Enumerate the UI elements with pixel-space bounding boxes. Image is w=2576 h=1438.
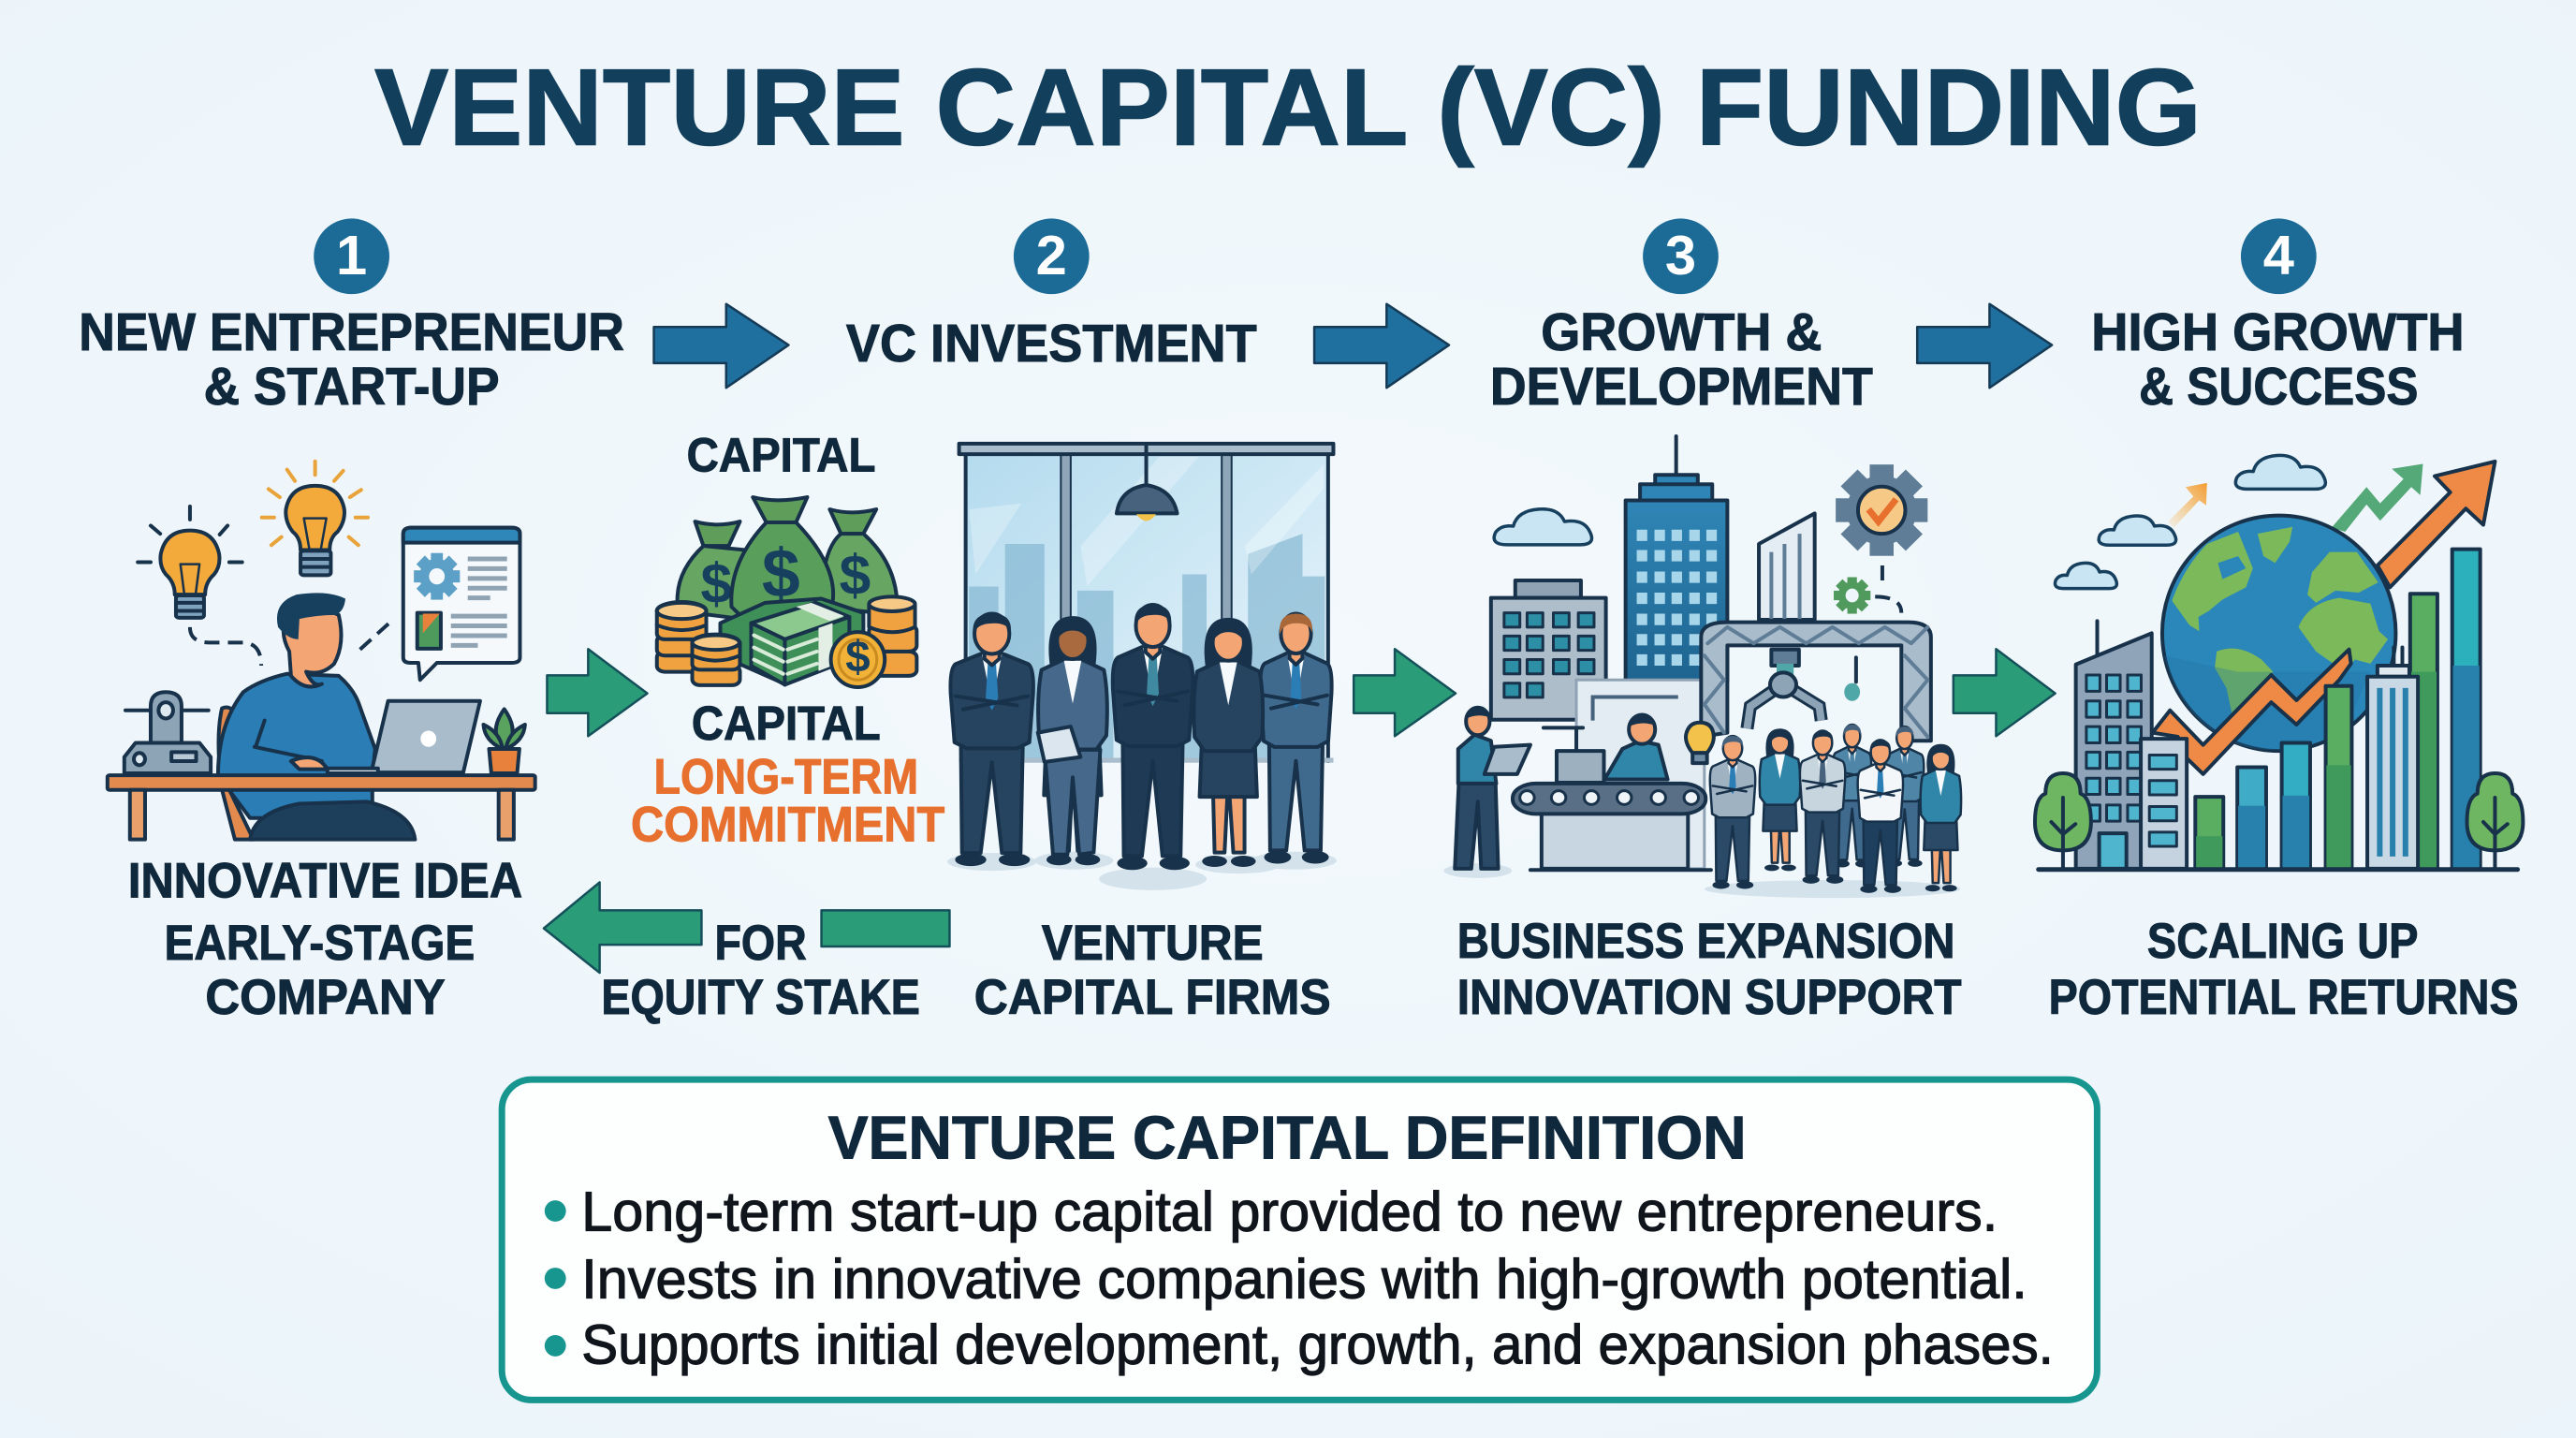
icon: money bags, coins and cash: $	[701, 551, 732, 615]
arrow: idea to capital	[547, 649, 648, 736]
bullet 3: Supports initial development, growth, and expansion phases.	[581, 1313, 2054, 1376]
label: scaling up, potential returns: POTENTIAL RETURNS	[2049, 970, 2519, 1025]
arrow: firms to growth	[1354, 649, 1456, 736]
step number 3: 3	[1665, 224, 1696, 286]
icon: conveyor belt	[1513, 727, 1711, 870]
worker with tablet	[1443, 707, 1530, 878]
icon: green gear	[1834, 578, 1870, 614]
label: business expansion, innovation support: BUSINESS EXPANSION	[1457, 914, 1955, 969]
label: long-term commitment: LONG-TERM	[654, 750, 918, 805]
step number 4	[2241, 218, 2317, 294]
icon: potted plant	[483, 709, 525, 773]
robot arm	[1747, 650, 1860, 728]
label: for equity stake	[601, 916, 920, 1025]
gantry crane	[1701, 623, 1931, 741]
orange zigzag growth line	[2153, 650, 2351, 774]
step number 1	[314, 218, 389, 294]
arrow: step 3 to 4	[1917, 304, 2052, 388]
step 2 heading: VC INVESTMENT	[846, 314, 1257, 373]
label: business expansion, innovation support: INNOVATION SUPPORT	[1457, 970, 1962, 1025]
worker seated at machine	[1604, 714, 1668, 779]
factory wall	[1576, 680, 1705, 869]
label: early-stage company: COMPANY	[205, 970, 446, 1025]
team of staff	[1705, 725, 1961, 898]
icon: entrepreneur at desk with ideas	[108, 462, 916, 840]
arrow: equity stake return	[544, 882, 949, 973]
label: capital (lower): CAPITAL	[692, 697, 881, 750]
big orange arrow	[2378, 462, 2495, 587]
icon: bulb	[1686, 723, 1714, 763]
icon: coin stacks	[657, 596, 916, 687]
ceiling lamp	[1117, 447, 1178, 521]
label: venture capital firms	[974, 916, 1331, 1025]
label: capital (top): CAPITAL	[687, 429, 875, 482]
label: scaling up, potential returns: SCALING UP	[2147, 914, 2419, 969]
step 4 heading	[2091, 218, 2465, 416]
label: business expansion, innovation support	[1457, 914, 1962, 1025]
team members	[950, 605, 1332, 870]
icon: chair	[219, 708, 254, 840]
illustration: high growth and success	[2035, 455, 2523, 870]
label: innovative idea: INNOVATIVE IDEA	[128, 853, 522, 908]
step 1 heading: & START-UP	[204, 357, 500, 416]
label: early-stage company: EARLY-STAGE	[165, 916, 475, 971]
label: for equity stake: FOR	[714, 916, 807, 971]
panel: venture capital definition	[502, 1079, 2097, 1400]
label: scaling up, potential returns	[2049, 914, 2519, 1025]
step 4 heading: HIGH GROWTH	[2091, 302, 2465, 361]
title: VENTURE CAPITAL (VC) FUNDING	[374, 46, 2202, 168]
icon: money bags, coins and cash: $	[840, 543, 871, 607]
label: for equity stake: EQUITY STAKE	[601, 970, 920, 1025]
icon: money bags, coins and cash: $	[762, 534, 800, 611]
arrow: step 2 to 3	[1314, 304, 1449, 388]
skyscraper	[2367, 648, 2418, 869]
icon: small light bulb	[138, 506, 242, 618]
step 3 heading	[1490, 218, 1873, 416]
clouds	[2055, 455, 2325, 589]
grey office building	[1491, 580, 1606, 720]
small orange arrow	[2168, 483, 2207, 528]
icon: prototype machine	[124, 692, 211, 773]
definition heading: VENTURE CAPITAL DEFINITION	[828, 1103, 1747, 1171]
cloud	[1494, 509, 1591, 545]
icon: idea window speech bubble	[403, 528, 520, 680]
bullet 2: Invests in innovative companies with high-growth potential.	[581, 1248, 2027, 1311]
label: venture capital firms: VENTURE	[1042, 916, 1264, 971]
label: long-term commitment: COMMITMENT	[631, 798, 944, 853]
step 2 heading	[846, 218, 1257, 373]
label: long-term commitment	[631, 750, 944, 853]
icon: person	[218, 593, 415, 840]
icon: cash stack	[721, 599, 863, 684]
bar chart	[2195, 550, 2481, 869]
small building	[2141, 739, 2187, 869]
step 1 heading: NEW ENTREPRENEUR	[79, 302, 624, 361]
trees	[2035, 773, 2523, 869]
arrow: step 1 to 2	[654, 304, 788, 388]
icon: gear with check	[1836, 464, 1927, 556]
step 4 heading: & SUCCESS	[2139, 357, 2419, 416]
blue tower	[1626, 436, 1727, 682]
step number 2: 2	[1036, 224, 1067, 286]
step 1 heading	[79, 218, 624, 416]
icon: coin stacks: $	[845, 632, 871, 682]
icon: desk	[108, 775, 535, 840]
step number 4: 4	[2263, 224, 2294, 286]
green zigzag arrow	[2332, 464, 2423, 532]
illustration: growth and development factory	[1443, 436, 1961, 898]
label: early-stage company	[165, 916, 475, 1025]
step 3 heading: GROWTH &	[1541, 302, 1822, 361]
icon: money bags, coins and cash	[657, 497, 916, 687]
slanted building	[1759, 513, 1815, 620]
step 3 heading: DEVELOPMENT	[1490, 357, 1873, 416]
bullet 1: Long-term start-up capital provided to new entrepreneurs.	[581, 1181, 1998, 1243]
label: venture capital firms: CAPITAL FIRMS	[974, 970, 1331, 1025]
step number 2	[1014, 218, 1090, 294]
step number 1: 1	[336, 224, 367, 286]
globe	[2162, 516, 2395, 751]
office window	[959, 444, 1333, 763]
step number 3	[1643, 218, 1719, 294]
arrow: growth to success	[1954, 649, 2056, 736]
icon: laptop	[328, 701, 480, 773]
icon: large light bulb	[262, 462, 368, 575]
tall grey building	[2076, 621, 2152, 869]
illustration: venture capital firm team	[947, 444, 1337, 890]
